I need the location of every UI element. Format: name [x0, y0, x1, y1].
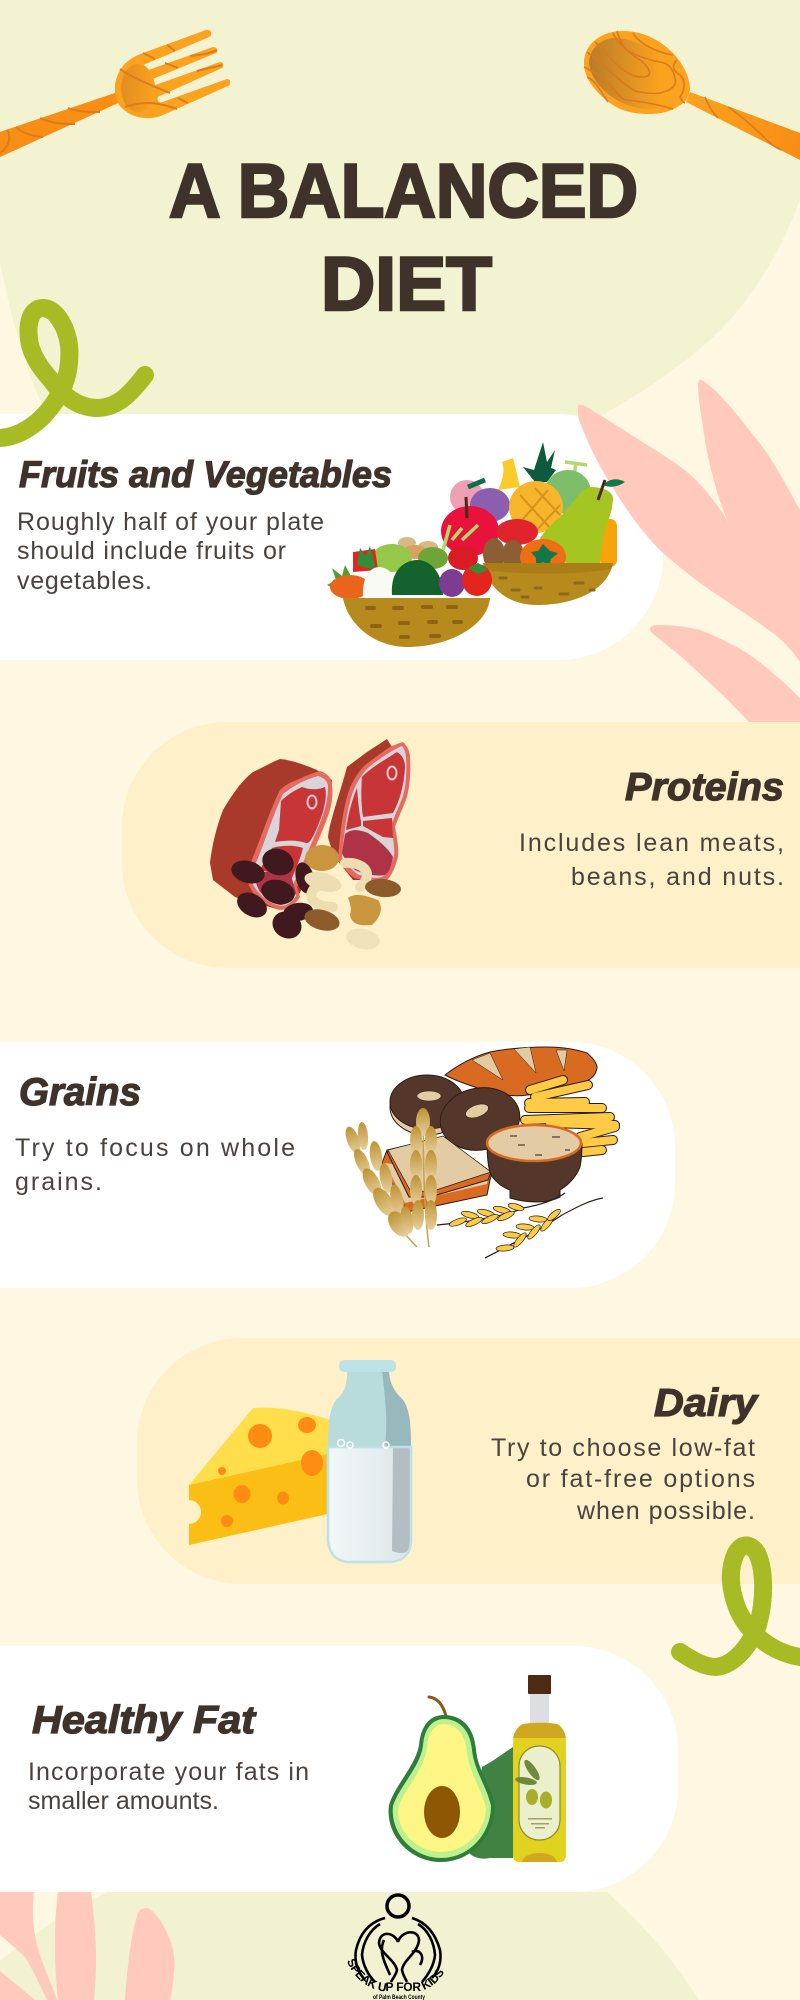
heading: proteins: Proteins [625, 766, 784, 809]
text: healthy fat description: Incorporate your fats in [28, 1758, 309, 1786]
panel: fruits and vegetables content [17, 442, 625, 647]
text: dairy description [491, 1434, 755, 1525]
panel: proteins background [122, 722, 800, 968]
icon: wooden spoon [584, 31, 800, 160]
pink leaf decoration: bottom left [0, 1892, 175, 2000]
text: proteins description: Includes lean meats, [519, 829, 784, 857]
icon: olive oil bottle [513, 1675, 566, 1862]
title: A BALANCED [169, 149, 638, 234]
text: fruits and vegetables description [17, 508, 324, 595]
top background blob [0, 0, 800, 440]
text: healthy fat description [28, 1758, 309, 1815]
icon: wooden fork [0, 30, 230, 157]
panel: dairy background [137, 1338, 800, 1584]
heading: healthy fat: Healthy Fat [32, 1699, 257, 1742]
panel: healthy fat background [0, 1646, 678, 1892]
heading: grains: Grains [19, 1071, 141, 1114]
heading: fruits and vegetables: Fruits and Vegetables [19, 454, 392, 495]
text: fruits and vegetables description: should include fruits or [17, 537, 286, 565]
icon: meat, beans and nuts [210, 739, 410, 952]
text: fruits and vegetables description: vegetables. [17, 567, 152, 595]
pink leaf decoration: top right [578, 379, 800, 722]
bottom background blob [0, 1892, 699, 2000]
icon: avocado [389, 1697, 513, 1862]
green squiggle: top left [0, 308, 145, 438]
text: healthy fat description: smaller amounts. [28, 1787, 219, 1815]
logo: speak up for kids [348, 1893, 444, 2000]
panel: dairy content [177, 1360, 759, 1562]
title [169, 149, 638, 327]
text: grains description: grains. [15, 1168, 102, 1196]
icon: milk bottle [328, 1360, 411, 1562]
icon: fruit and vegetable baskets [327, 442, 625, 647]
panel: proteins content [210, 739, 784, 952]
panel: fruits and vegetables background [0, 414, 663, 660]
title: DIET [321, 242, 492, 327]
text: dairy description: or fat-free options [526, 1465, 755, 1493]
heading: dairy: Dairy [654, 1382, 759, 1425]
text: dairy description: Try to choose low-fat [491, 1434, 755, 1462]
icon: grains and bread [343, 1047, 615, 1258]
text: proteins description: beans, and nuts. [571, 863, 784, 891]
text: grains description: Try to focus on whole [15, 1134, 295, 1162]
panel: healthy fat content [28, 1675, 566, 1862]
panel: grains content [15, 1047, 615, 1258]
green squiggle: bottom right [680, 1546, 800, 1667]
logo: speak up for kids: SPEAK UP FOR KIDS [348, 1958, 444, 1992]
text: proteins description [519, 829, 784, 891]
text: dairy description: when possible. [576, 1497, 755, 1525]
icon: cheese wedge [177, 1408, 332, 1545]
text: fruits and vegetables description: Roughly half of your plate [17, 508, 324, 536]
text: grains description [15, 1134, 295, 1196]
panel: grains background [0, 1042, 675, 1288]
